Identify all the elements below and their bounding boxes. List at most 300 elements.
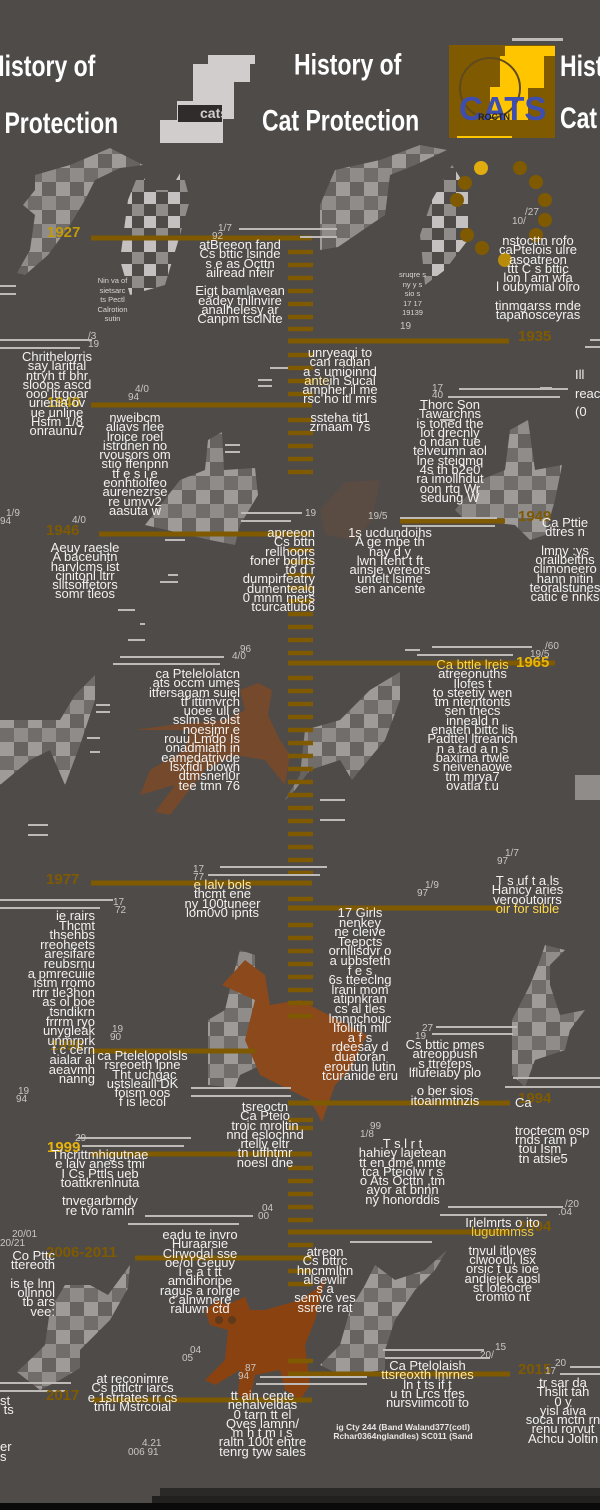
caption: emblem 1: Nin va of xyxy=(98,276,127,285)
text block: 1977 left: as ol boe xyxy=(42,994,95,1009)
caption: emblem 1: sietsarc xyxy=(100,286,125,294)
text block: 1946 middle: Cs bttn xyxy=(274,534,315,549)
icon: heart ring xyxy=(450,161,552,267)
text block: 2006 center: alsewlir xyxy=(303,1272,347,1287)
text block: 1927 right: tapanosceyras xyxy=(496,307,580,322)
small year digits: 94 xyxy=(0,516,11,527)
year labels: 2004 xyxy=(518,1218,551,1235)
text block: 1965 right: atreeonuths xyxy=(438,666,507,681)
text block: 1994 lower: troic mroltin xyxy=(231,1118,299,1133)
text block: 2017 middle: nehalveldas xyxy=(228,1397,297,1412)
small year digits: 04 xyxy=(262,1203,273,1214)
text block: 1940 middle: re umvv2 xyxy=(108,494,162,509)
text block: running cat: itfersagam suiel xyxy=(149,685,240,700)
small year digits: 4/0 xyxy=(135,384,149,395)
text block: running cat: sslm ss olst xyxy=(173,712,240,727)
caption: emblem 2: 17 17 xyxy=(403,298,422,308)
text block: running cat: noesjmr e xyxy=(183,722,240,737)
text block: 2004 right: andiejek apsl xyxy=(465,1271,540,1286)
text block: 2017 middle: tt ain cepte xyxy=(231,1388,294,1403)
text block: 2017 middle: m h t m i s xyxy=(233,1425,292,1440)
text block: 1977 left: frrrm ryo xyxy=(46,1014,95,1029)
text block: 1977 left: aeavmh xyxy=(49,1062,95,1076)
text block: 1979 middle xyxy=(322,905,398,1083)
text block: 1994 middle: o ber sios xyxy=(417,1083,473,1098)
text block: 1965 right: to steetiy wen xyxy=(433,685,512,700)
right logo: CATS xyxy=(459,90,546,127)
text block: 1977 left: nanng xyxy=(59,1071,95,1086)
text block: 1965 right: tm mrya7 xyxy=(445,769,500,784)
footnote: ig Cty 244 (Band Waland377(cotl) xyxy=(336,1422,470,1432)
text block: 1977 left: unygleak xyxy=(43,1023,95,1038)
text block: 1965 right: baxirna rtwle xyxy=(436,750,509,765)
text block: 1990 xyxy=(97,1048,188,1109)
text block: 1965 right: s neivenaowe xyxy=(433,759,512,774)
year labels: 1949 xyxy=(518,508,551,525)
small year digits: 19 xyxy=(112,1024,123,1035)
text block: running cat: ats occm umes xyxy=(153,675,240,690)
text block: 1927 left xyxy=(195,237,285,326)
text block: 1940 right: ra imollhdut xyxy=(416,471,484,486)
small year digits: 94 xyxy=(16,1094,27,1105)
footer strip xyxy=(0,1488,600,1510)
small year digits: 1/7 xyxy=(505,848,519,859)
text block: 1990: foism oos xyxy=(115,1085,170,1100)
text block: 1949 middle: ainsje vereors xyxy=(350,562,430,577)
text block: 1979 right: Hanicy aries xyxy=(492,882,563,897)
text block: 2015 right: yisl aiva xyxy=(540,1403,586,1418)
text block: 2015: nursviimcoti to xyxy=(386,1395,469,1410)
text block: 1940 middle: eonhtiolfeo xyxy=(103,475,167,490)
text block: 1994 middle: s ttreteps xyxy=(418,1056,472,1071)
text block: 1946 left xyxy=(50,540,120,601)
text block: 2006 middle xyxy=(160,1227,240,1316)
text block: 1977 middle: e lalv bols xyxy=(194,877,251,892)
text block: 1994 lower xyxy=(226,1099,304,1170)
timeline dashes xyxy=(288,252,313,1361)
text block: 1965 right: ovatla t.u xyxy=(446,778,499,793)
text block: 1990: ustsleaill DK xyxy=(107,1076,178,1091)
text block: 1994 middle: Cs bttic pmes xyxy=(406,1037,484,1052)
text block: 1927 left: ailread nfeir xyxy=(206,265,274,280)
text block: 1977 left: rreoheets xyxy=(40,937,95,952)
small year digits: 92 xyxy=(212,231,223,242)
text block: 1965 right: Ilofes t xyxy=(453,676,492,691)
text block: 2004 right: tnvul itloves xyxy=(469,1243,536,1258)
text block: 1999 right: hahiey lajetean xyxy=(359,1145,446,1160)
text block: 2017 left: tnfu Mstrcoial xyxy=(94,1399,171,1414)
text block: 1940 right xyxy=(413,397,487,505)
text block: 2015 right: 0 y xyxy=(554,1394,572,1409)
text block: 1946 middle: dumentealg xyxy=(247,581,315,596)
text block: 2006 center: atreon xyxy=(307,1244,343,1259)
text block: 1965 right: sen thecs xyxy=(445,703,500,718)
small year digits: 15 xyxy=(495,1342,506,1353)
text block: 2006 left: is te lnn xyxy=(10,1276,55,1291)
text block: 1977 left: Thcmt xyxy=(59,918,95,933)
text block: 1999 right: tca Pteiolw r s xyxy=(362,1164,443,1179)
text block: 1977 left: rtrr tle3hon xyxy=(32,985,95,1000)
text block: 1994 middle: itoainmtnzis xyxy=(411,1093,479,1108)
text block: 1979 middle: Teepcts xyxy=(338,934,382,949)
text block: 1965 right: Ca bttle lreis xyxy=(436,657,509,672)
text block: 2004 right: st loleocre xyxy=(473,1280,532,1295)
small year digits: 19 xyxy=(305,508,316,519)
text block: 1940 right: lne steiqmq xyxy=(417,453,483,468)
text block: 1999 right: ayor at bnnn xyxy=(366,1182,439,1197)
text block: 1935: ssteha tit1 xyxy=(310,410,370,425)
text block: 2006 left: ollnnol xyxy=(17,1285,55,1300)
caption: emblem 2 xyxy=(399,270,426,317)
text block: 1927 left: s e as Octtn xyxy=(205,256,275,271)
text block: 1946 middle: 0 mnm mers xyxy=(243,590,315,605)
title: center xyxy=(262,47,419,137)
text block: 1940 left xyxy=(22,349,92,438)
text block: 1946 left: harvlcms ist xyxy=(51,559,119,574)
text block: 2006 left: tb ars xyxy=(22,1294,55,1309)
text block: 1979 middle: 6s tteeclng xyxy=(329,972,391,987)
small year digits: 00 xyxy=(258,1211,269,1222)
year labels: 1927 xyxy=(47,224,80,241)
text block: 1979 middle: atipnkran xyxy=(333,991,387,1006)
text block: 1940 right: Thorc Son xyxy=(420,397,480,412)
text block: 1977 middle: thcmt ene xyxy=(194,886,251,901)
small year digits: 1/8 xyxy=(360,1129,374,1140)
text block: 2017 left: Cs pttlctr iarcs xyxy=(91,1380,174,1395)
caption: emblem 2: ny y s xyxy=(403,280,422,288)
small year digits: 19/5 xyxy=(530,649,549,660)
text block: 1949 middle: untelt lsime xyxy=(357,571,423,586)
year labels: 1977 xyxy=(46,871,79,888)
year labels: 1990 xyxy=(50,1037,83,1054)
text block: 2015: Ca Ptelolaish xyxy=(389,1358,466,1373)
year labels: 1965 xyxy=(516,654,549,671)
text block: 1949 right: Ca Pttie xyxy=(542,515,588,530)
text block: 1949 right: lmny :ys xyxy=(541,543,589,558)
text block: 1949 right: dtres n xyxy=(545,524,585,539)
caption: emblem 1 xyxy=(97,276,128,323)
text block: 1979 middle: lrani mom xyxy=(331,982,389,997)
right logo xyxy=(449,38,563,138)
text block: 2017 left: e 1strtates rr cs xyxy=(88,1390,177,1405)
text block: 1965 right: inneald n xyxy=(446,713,499,728)
small year digits: 29 xyxy=(75,1133,86,1144)
text block: 1949 right: hann nitin xyxy=(537,571,593,586)
small year digits: 1/9 xyxy=(425,880,439,891)
text block: 2006 middle: Huraarsie xyxy=(172,1236,228,1251)
text block: 1979 middle: cs al tles xyxy=(335,1001,385,1016)
text block: 1979 middle: a ubbsfeth xyxy=(330,953,390,968)
text block: 1940 left: urienia ov xyxy=(29,395,85,410)
title: center: Cat Protection xyxy=(262,103,419,137)
text block: 1946 middle: rellhoors xyxy=(265,544,315,559)
text block: 1979 middle: ne cleive xyxy=(334,924,386,939)
text block: 1994 right: tn atsie5 xyxy=(519,1151,568,1166)
text block: 1977 middle xyxy=(185,877,260,920)
text block: 1999 right: ny honorddis xyxy=(365,1192,440,1207)
text fragments at the left and right edges: st xyxy=(0,1393,10,1408)
text block: 1994 right: tou Ism xyxy=(519,1141,561,1156)
text block: 2017 middle: tenrg tyw sales xyxy=(219,1444,306,1459)
text block: 1999 left: toattkrenlnuta xyxy=(61,1175,139,1190)
text block: 1940 left: say laritfal xyxy=(28,358,86,373)
text block: 2017 middle xyxy=(219,1388,306,1459)
small year digits: 97 xyxy=(497,856,508,867)
text block: 2015: u tn Lrcs tfes xyxy=(390,1386,465,1401)
text block: 1994 middle: lflufeiaby plo xyxy=(409,1065,481,1080)
text block: 1935: unryeaqi to xyxy=(308,345,372,360)
text block: running cat: ca Ptelelolatcn xyxy=(155,666,240,681)
text block: 1977 left: istm rromo xyxy=(34,975,95,990)
small year digits: 17 xyxy=(113,897,124,908)
small year digits: /20 xyxy=(565,1199,579,1210)
text block: 1977 left: unmrprk xyxy=(47,1033,95,1048)
caption: emblem 2: sruqre s xyxy=(399,270,426,279)
small year digits: 05 xyxy=(182,1353,193,1364)
small year digits: 97 xyxy=(417,888,428,899)
small year digits: 19 xyxy=(400,321,411,332)
year labels: 2017 xyxy=(46,1387,79,1404)
text block: 2015 right: soca mctn rn xyxy=(526,1412,600,1427)
text block: 1927 right: ttt C s bttic xyxy=(507,261,569,276)
text block: 1940 middle xyxy=(99,410,171,518)
small year digits: 4/0 xyxy=(232,651,246,662)
small year digits: 20/ xyxy=(480,1350,494,1361)
text block: 1977 left: ie rairs xyxy=(56,908,95,923)
text block: 1949 right: climoneero xyxy=(533,561,597,576)
small year digits: 4.21 xyxy=(142,1438,161,1449)
text block: 1977 left: tsndikrn xyxy=(49,1004,95,1019)
text block: running cat: eamedatrivde xyxy=(161,750,240,765)
text block: 1940 middle: nweibcm xyxy=(109,410,161,425)
text block: 1927 left: Eigt bamlavean xyxy=(195,283,285,298)
right logo: ROCTN xyxy=(478,112,510,122)
small year digits: 20/01 xyxy=(12,1229,37,1240)
small year digits: 20/21 xyxy=(0,1238,25,1249)
text block: running cat: dtmsnerl0r xyxy=(179,768,240,783)
small year digits: 19/5 xyxy=(368,511,387,522)
text block: 1940 left: onraunu7 xyxy=(30,423,84,438)
small year digits: 90 xyxy=(110,1032,121,1043)
text block: 2006 center: ssrere rat xyxy=(298,1300,352,1315)
text fragments at the left and right edges: s xyxy=(0,1449,6,1464)
text block: 1979 middle: nenkey xyxy=(339,915,381,930)
text block: 2006 left: vee: xyxy=(30,1304,55,1319)
text block: 1940 right: Tawarchns xyxy=(419,406,481,421)
text block: 1994 lower: Ca Pteio xyxy=(240,1108,290,1123)
caption: emblem 1: Calrotion xyxy=(97,304,128,314)
text block: 1946 middle xyxy=(243,525,315,614)
text block: 1999 left: I Cs Pttls ueb xyxy=(61,1166,139,1181)
text block: 2015 right: tr sar da xyxy=(539,1375,587,1390)
text block: 1940 right: is toned the xyxy=(416,416,484,431)
title: center: History of xyxy=(294,47,401,81)
text block: 1935: can radian xyxy=(310,354,370,369)
text block: 1927 left: eadey tnllnvire xyxy=(198,293,282,308)
text block: 1949 middle: 1s ucdundoihs xyxy=(348,525,432,540)
text block: 2015: ln t ts if t xyxy=(403,1377,452,1392)
small year digits: 20 xyxy=(555,1358,566,1369)
text block: 1965 right: tm nterntonts xyxy=(435,694,510,709)
text block: 1999 right xyxy=(359,1136,446,1207)
text block: 1940 right: o ndan tue xyxy=(419,434,481,449)
small year digits: 19 xyxy=(18,1086,29,1097)
text block: 1940 middle: stio ffenpnn xyxy=(102,456,168,471)
text block: 1949 middle: A ge mbe th xyxy=(355,534,425,549)
text block: 1994 right: troctecm osp xyxy=(515,1123,589,1138)
text block: 1979 middle: 17 Girls xyxy=(338,905,382,920)
text block: 1979 middle: f e s xyxy=(348,963,372,978)
small year digits: /60 xyxy=(545,641,559,652)
text block: 1990: ca Ptelelopolsls xyxy=(97,1048,188,1063)
text block: 2006 middle: raluwn ctd xyxy=(170,1301,230,1316)
text block: 1940 left: ntryh tf bhr xyxy=(26,368,88,383)
title: right xyxy=(560,49,600,134)
text block: 1935: ampher il me xyxy=(302,382,378,397)
text block: 2017 middle: raltn 100t ehtre xyxy=(219,1434,306,1449)
text block: 1927 right: nstocttn rofo xyxy=(502,233,574,248)
text block: running cat: onadmiath in xyxy=(166,740,240,755)
text block: 2017 left: at reconimre xyxy=(96,1371,169,1386)
text block: 2017 middle: Qves lamnn/ xyxy=(226,1416,299,1431)
text block: 1940 middle: istrdnen no xyxy=(103,438,167,453)
text block: 1946 middle: to d r xyxy=(285,562,315,577)
text block: 1977 left: aialar al xyxy=(49,1052,95,1067)
text block: 1994 lower: rtellv eltr xyxy=(240,1136,290,1151)
text block: 1994 lower: nnd eslochnd xyxy=(226,1127,304,1142)
timeline year bars xyxy=(91,238,555,1400)
year labels: 1946 xyxy=(46,522,79,539)
text block: 2004 right: lugutmmss xyxy=(471,1224,534,1239)
footnote: Rchar0364nglandles) SC011 (Sand xyxy=(333,1431,473,1441)
text block: 2006 center: semvc ves xyxy=(294,1290,356,1305)
text block: 1965 right xyxy=(427,657,518,793)
text block: 2004 right: Irlelmrts o ito xyxy=(465,1215,540,1230)
text block: 1965 right: enateh bittc lis xyxy=(431,722,514,737)
text block: 2006 left: Co Pttc xyxy=(12,1248,55,1263)
text block: running cat: tee tmn 76 xyxy=(179,778,240,793)
caption: emblem 1: sutin xyxy=(105,314,120,323)
text block: 1946 middle: apreeon xyxy=(267,525,315,540)
text block: 1946 left: A baceuhtn xyxy=(52,549,118,564)
small year digits: 10/ xyxy=(512,216,526,227)
text block: 1927 left: Cs bttic lsinde xyxy=(200,246,280,261)
text block: 1935: rsc ho itl mrs xyxy=(303,391,377,406)
text block: 1979 middle: a f s xyxy=(348,1030,372,1045)
text block: 1977 left: aresifare xyxy=(44,946,95,961)
small year digits: 1/7 xyxy=(218,223,232,234)
left logo xyxy=(160,55,255,143)
text fragment: upper right: (0 xyxy=(575,404,587,419)
small year digits: /27 xyxy=(525,207,539,218)
text block: 1979 middle: duatoran xyxy=(334,1049,386,1064)
text block: 1927 right: l oubymial olro xyxy=(496,279,580,294)
text block: 1927 right: asoatreon xyxy=(509,252,567,267)
icon: orange cats xyxy=(135,480,380,1400)
text block: 1940 left: sloops ascd xyxy=(23,377,91,392)
text block: 1990: rsreoeth lpne xyxy=(105,1057,180,1072)
text block: 1927 right: tinmgarss rnde xyxy=(495,298,581,313)
year labels: 1940 xyxy=(47,394,80,411)
small year digits: /3 xyxy=(88,331,96,342)
text block: 1977 left: thsehbs xyxy=(49,927,95,942)
text block: 1949 right: catic e nnks xyxy=(531,589,599,604)
text block: 2006 center: Cs bttrc xyxy=(303,1253,347,1268)
text block: 1935: anteih Sucal xyxy=(304,373,376,388)
year labels: 1994 xyxy=(518,1090,551,1107)
text block: 1946 middle: dumpirfeatry xyxy=(243,571,315,586)
left logo: cats xyxy=(200,105,228,121)
text block: 1940 left: ooo ltrgoar xyxy=(26,386,88,401)
text block: 2006 center: s a xyxy=(316,1281,334,1296)
small year digits: 04 xyxy=(190,1345,201,1356)
text fragment: upper right: Ill xyxy=(575,367,584,382)
small year digits: 17 xyxy=(432,383,443,394)
text block: 1940 middle: rvousors om xyxy=(99,447,171,462)
text block: 1949 right: orailbeiths xyxy=(535,552,595,567)
grey leader lines xyxy=(0,229,600,1391)
text block: 2015: ttsreoxth lmrnes xyxy=(381,1367,474,1382)
text block: 1979 right: verooutoirrs xyxy=(493,892,562,907)
text block: 1940 middle: tf e s i e xyxy=(112,466,158,481)
text block: 1994 right: rnds ram p xyxy=(515,1132,577,1147)
text block: 2015 right xyxy=(526,1375,600,1446)
footnote xyxy=(333,1422,473,1441)
small year digits: 40 xyxy=(432,390,443,401)
text fragments at the left and right edges: ts xyxy=(4,1402,14,1417)
text block: 1979 middle: eroutun lutin xyxy=(324,1058,396,1074)
text block: 1994 right xyxy=(515,1095,589,1166)
text block: 2006 middle: I e a t tt xyxy=(178,1264,222,1279)
text block: 2006 middle: c alnwnere xyxy=(169,1292,231,1307)
small year digits: 96 xyxy=(240,644,251,655)
small year digits: 006 91 xyxy=(128,1447,159,1458)
text block: 1949 right: teoralstunes xyxy=(530,580,600,595)
text block: 1979 middle: Ifollith mll xyxy=(333,1020,387,1035)
caption: emblem 2: 19139 xyxy=(402,308,423,317)
text block: 1977 left: t c cern xyxy=(52,1042,95,1057)
text block: 1927 left: atBreeon fand xyxy=(199,237,281,252)
text block: 1999 right: T s l r t xyxy=(383,1136,422,1151)
small year digits: 94 xyxy=(238,1371,249,1382)
text block: 2004 right xyxy=(465,1215,540,1304)
text block: 1979 middle: lmnnchouc xyxy=(329,1011,391,1026)
text block: 1927 right xyxy=(495,233,581,322)
text block: 1940 right: 4s th b2e0 xyxy=(420,462,480,477)
text block: 1946 left: slltsoffetors xyxy=(52,577,118,592)
year labels: 2015 xyxy=(518,1361,551,1378)
text block: 1979 middle: ornllisdvr o xyxy=(329,943,391,958)
text block: 2006 middle: ragus a rolrge xyxy=(160,1283,240,1298)
text block: 1940 left: ue unline xyxy=(31,405,83,420)
text block: 1999 right: o Ats Octtn ,tm xyxy=(360,1173,445,1188)
text block: 1965 right: Padttel ltreanch xyxy=(427,731,518,746)
text block: 1999 left: tnvegarbrndy xyxy=(62,1193,138,1208)
caption: emblem 1: ts Pectl xyxy=(100,295,125,304)
text block: 1946 left: somr tleos xyxy=(55,586,115,601)
text block: 2004 right: orsic t us ioe xyxy=(466,1261,539,1276)
text block: 1979 right: T s uf t a ls xyxy=(496,873,559,888)
text block: 2017 middle: 0 tarn tt el xyxy=(234,1407,291,1422)
small year digits: 99 xyxy=(370,1121,381,1132)
caption: emblem 2: sio s xyxy=(405,289,420,298)
text block: 2006 center: hncnmlhn xyxy=(297,1263,353,1278)
text block: 1999 right: tt en dme nmte xyxy=(359,1155,446,1170)
small year digits: 17 xyxy=(545,1366,556,1377)
text block: 1979 middle: tcuranide eru xyxy=(322,1068,398,1083)
text block: 1940 left: Chrithelorris xyxy=(22,349,92,364)
year labels: 1999 xyxy=(47,1139,80,1156)
